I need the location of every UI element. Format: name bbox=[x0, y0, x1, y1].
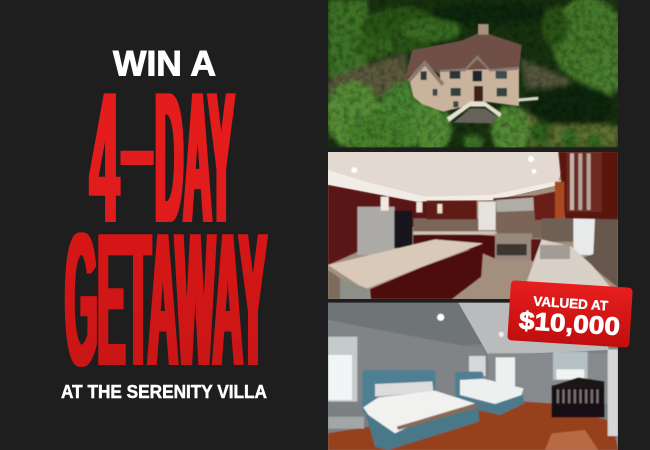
badge label: valued at: VALUED AT bbox=[533, 294, 609, 313]
headline: 4-day: DAY bbox=[155, 53, 234, 262]
headline: 4-day bbox=[90, 53, 234, 263]
photo: bedroom interior bbox=[328, 303, 618, 450]
subheading: at the serenity villa: AT THE SERENITY VILLA bbox=[61, 382, 267, 402]
headline: 4-day: - bbox=[118, 81, 156, 215]
badge: valued at $10,000 bbox=[507, 280, 633, 348]
headline: 4-day: 4 bbox=[90, 54, 119, 263]
headline: getaway: GETAWAY bbox=[65, 195, 267, 407]
photo: kitchen interior bbox=[328, 152, 618, 299]
heading: win a: WIN A bbox=[113, 44, 216, 84]
badge value: $10,000: $10,000 bbox=[518, 307, 621, 341]
photo: villa exterior aerial bbox=[325, 0, 625, 155]
